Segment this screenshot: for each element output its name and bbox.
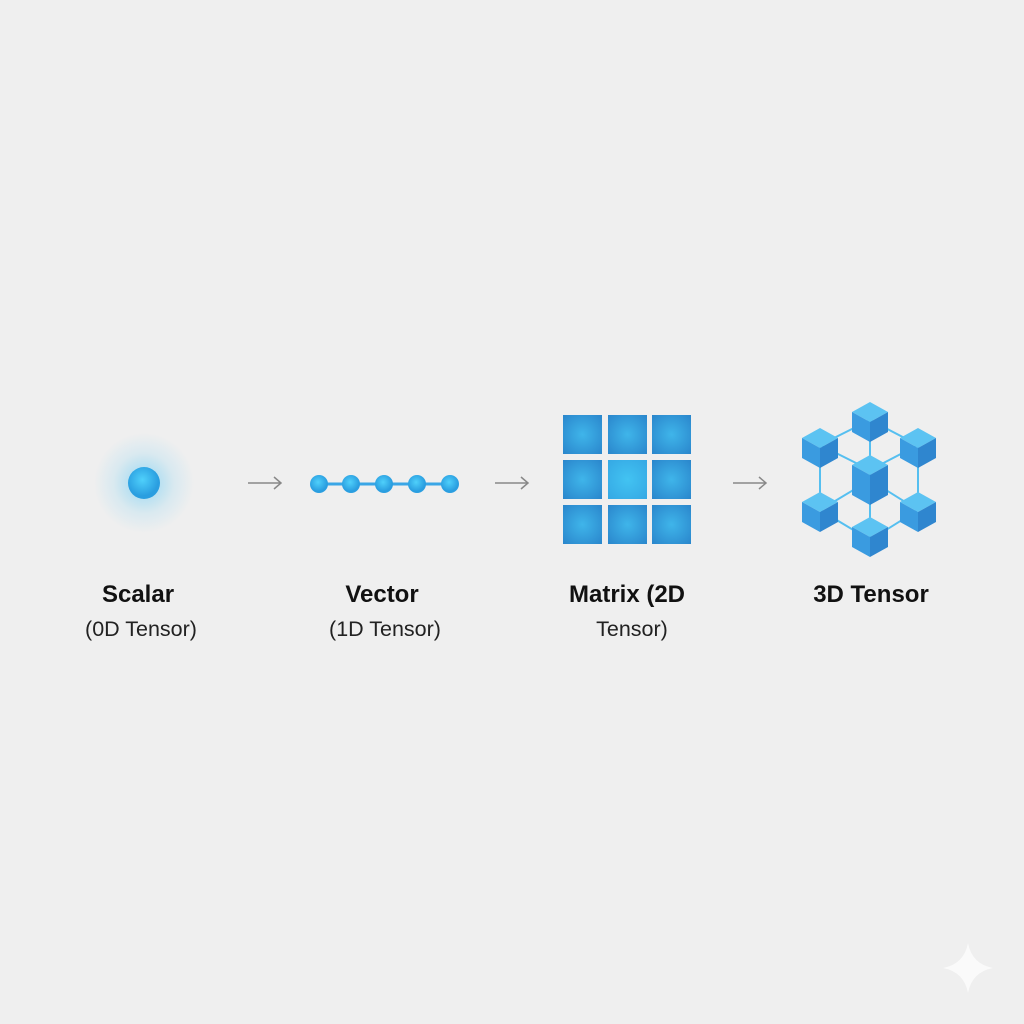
arrow 2 [495,477,528,489]
label: scalar: (0D Tensor) [85,617,197,641]
label: vector: Vector [345,581,419,608]
icon: vector [310,475,459,493]
label: matrix: Tensor) [596,617,668,641]
icon: 3D tensor cubes [802,402,936,557]
arrow 1 [248,477,281,489]
label: 3D tensor: 3D Tensor [813,581,929,608]
label: scalar [85,581,197,641]
label: vector [329,581,441,641]
label: scalar: Scalar [102,581,174,608]
label: vector: (1D Tensor) [329,617,441,641]
label: matrix: Matrix (2D [569,581,685,608]
label: matrix [569,581,685,641]
icon: sparkle [943,943,993,993]
icon: scalar dot [94,433,194,533]
arrow 3 [733,477,766,489]
icon: matrix grid [563,415,691,544]
